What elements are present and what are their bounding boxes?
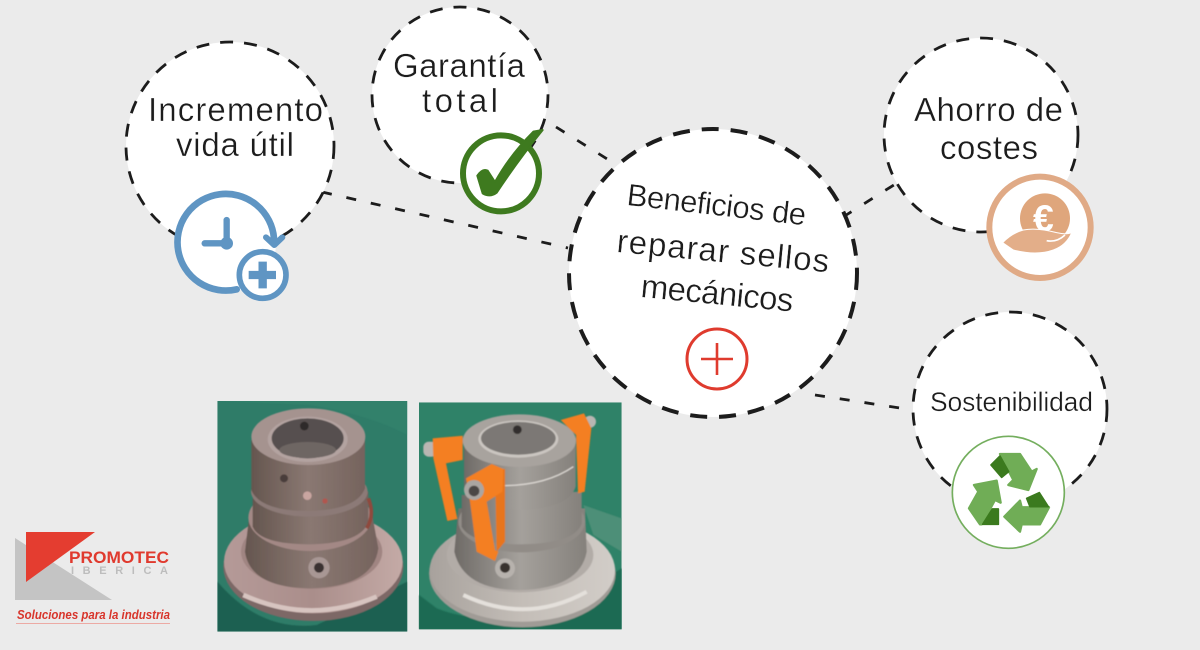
central heading line 1: Beneficios de (625, 177, 808, 232)
connector: sostenibilidad to centre (815, 395, 913, 410)
icon: green check (463, 130, 543, 211)
logo: Promotec Iberica (15, 532, 170, 624)
photo: worn mechanical seal (217, 401, 407, 632)
orange clips (423, 442, 437, 457)
photo: repaired mechanical seal with orange clips (419, 402, 622, 629)
bubble: garantía total (372, 7, 548, 183)
logo subword: IBERICA (71, 565, 168, 577)
bubble: incremento vida útil (126, 42, 334, 250)
label: incremento vida útil: vida útil (176, 126, 294, 163)
label: garantía total: total (422, 82, 498, 119)
label: garantía total: Garantía (393, 47, 526, 84)
connector: garantía to centre (556, 127, 612, 162)
logo grey triangle (15, 538, 112, 600)
logo red triangle (26, 532, 95, 582)
icon: euro in hand (989, 177, 1091, 278)
icon: clock with plus (177, 194, 286, 298)
bubble: sostenibilidad (913, 312, 1107, 506)
connector: ahorro to centre (843, 183, 897, 217)
icon: red plus (687, 329, 747, 389)
label: sostenibilidad: Sostenibilidad (930, 387, 1093, 417)
icon: euro in hand: € (1033, 197, 1054, 239)
label: ahorro de costes: Ahorro de (914, 91, 1063, 128)
icon: recycle (952, 436, 1064, 548)
connector: vida útil to centre (322, 192, 568, 248)
logo wordmark: PROMOTEC (69, 549, 169, 567)
bubble: ahorro de costes (884, 38, 1078, 232)
central heading line 3: mecánicos (639, 267, 795, 319)
label: ahorro de costes: costes (940, 129, 1038, 166)
label: incremento vida útil: Incremento (148, 91, 323, 128)
bubble: beneficios de reparar sellos mecánicos (569, 129, 857, 417)
central heading line 2: reparar sellos (615, 222, 831, 279)
logo tagline: Soluciones para la industria (17, 608, 170, 622)
